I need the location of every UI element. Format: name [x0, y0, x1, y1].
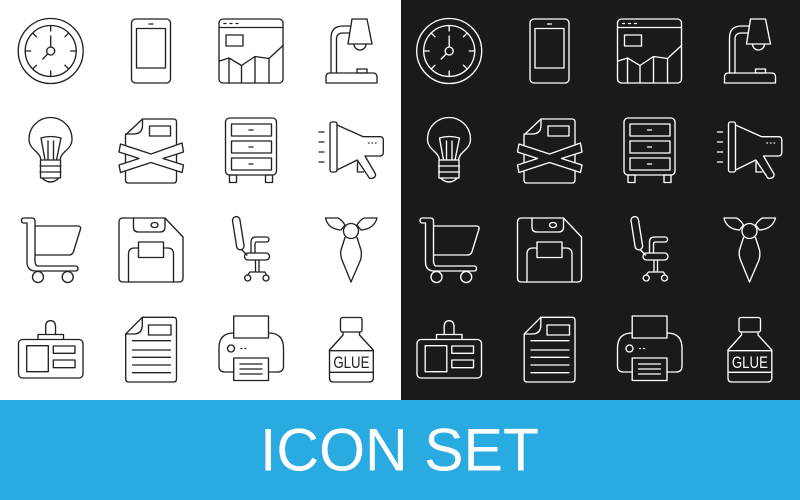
- icon: clock: [18, 18, 83, 84]
- icon: necktie: [326, 218, 377, 282]
- icon: glue bottle: [728, 318, 772, 382]
- icon: ID badge: [18, 321, 83, 378]
- icon: office chair: [232, 216, 270, 281]
- icon: glue bottle: [330, 318, 373, 382]
- icon: megaphone: [319, 122, 383, 178]
- icon: megaphone: [718, 122, 782, 178]
- icon: crossed-out document: [518, 119, 582, 183]
- icon: browser chart: [219, 19, 283, 83]
- title: ICON SET: [260, 417, 539, 484]
- icon: shopping cart: [420, 218, 479, 282]
- icon: light bulb: [29, 118, 72, 182]
- icon: floppy disk: [119, 218, 183, 282]
- icon: crossed-out document: [119, 119, 184, 183]
- panel: light icons: [0, 0, 401, 400]
- icon: text document: [126, 317, 176, 382]
- banner background: [0, 400, 800, 500]
- icon: light bulb: [428, 118, 470, 182]
- icon: office chair: [630, 216, 668, 281]
- icon: ID badge: [417, 321, 482, 378]
- panel background: dark: [401, 0, 800, 400]
- icon: desk lamp: [724, 19, 776, 83]
- icon: desk lamp: [326, 19, 377, 83]
- icon: drawer cabinet: [624, 118, 675, 182]
- icon: smartphone: [530, 19, 569, 83]
- panel: dark icons: [401, 0, 800, 400]
- icon: necktie: [724, 218, 776, 282]
- icon: printer: [618, 316, 682, 380]
- icon: glue bottle: GLUE: [333, 353, 369, 372]
- icon: clock: [417, 18, 482, 84]
- icon: floppy disk: [518, 218, 582, 282]
- icon: drawer cabinet: [226, 118, 276, 182]
- banner: [0, 400, 800, 500]
- icon: glue bottle: GLUE: [732, 353, 768, 372]
- icon: browser chart: [618, 19, 682, 83]
- icon: text document: [524, 317, 575, 382]
- icon: shopping cart: [22, 218, 81, 282]
- icon: printer: [219, 316, 284, 380]
- icon: smartphone: [132, 19, 170, 83]
- panel background: white: [0, 0, 401, 400]
